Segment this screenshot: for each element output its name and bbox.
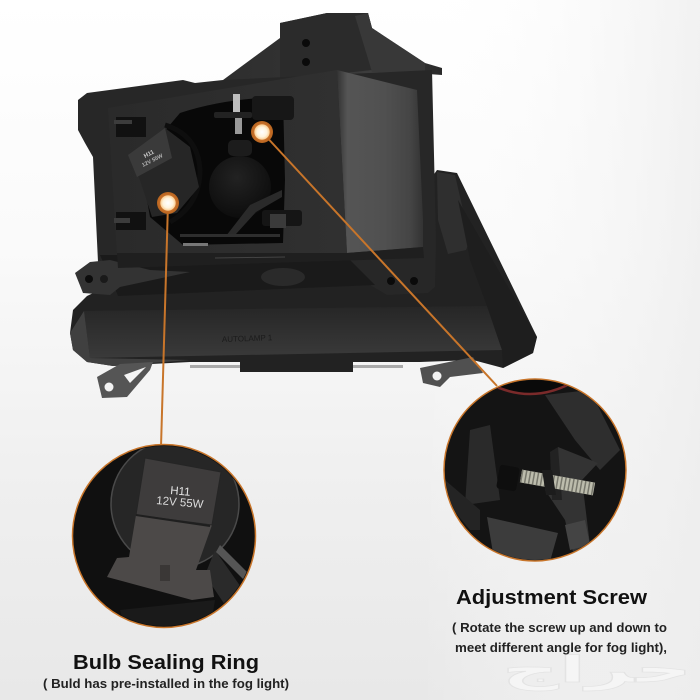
left mounting ear	[75, 260, 190, 295]
bulb cavity	[140, 97, 285, 246]
box front panel	[108, 70, 347, 253]
marker dot: adjustment screw	[251, 121, 273, 143]
bottom brackets	[97, 357, 483, 398]
leader line: bulb sealing ring	[161, 203, 168, 447]
top mounting bracket	[223, 13, 442, 100]
description: adjustment screw	[452, 620, 667, 655]
adjustment screw	[214, 94, 294, 134]
watermark: حراج	[502, 650, 692, 691]
detail circle: adjustment screw	[444, 378, 626, 565]
bulb connector with H11 label	[128, 125, 200, 222]
lower lens body	[70, 170, 537, 368]
rear housing	[78, 70, 436, 296]
heading: bulb sealing ring: Bulb Sealing Ring	[73, 651, 259, 674]
leader line: adjustment screw	[262, 132, 497, 386]
description: adjustment screw: meet different angle for fog light),	[455, 640, 667, 655]
bulb connector with H11 label: H11	[143, 149, 156, 160]
fog light product photo	[70, 13, 537, 398]
detail circle: bulb connector	[72, 440, 256, 630]
bulb connector with H11 label: 12V 55W	[141, 153, 165, 169]
description: bulb sealing ring: ( Buld has pre-installed in the fog light)	[43, 676, 289, 691]
marker dot: bulb sealing ring	[157, 192, 179, 214]
panel clips	[114, 117, 302, 230]
box side face	[337, 70, 423, 253]
heading: adjustment screw: Adjustment Screw	[456, 586, 647, 609]
detail circle: bulb connector: 12V 55W	[156, 495, 204, 511]
connector label: H11	[170, 485, 191, 499]
lower lens body: AUTOLAMP 1	[222, 333, 273, 344]
description: adjustment screw: ( Rotate the screw up and down to	[452, 620, 667, 635]
